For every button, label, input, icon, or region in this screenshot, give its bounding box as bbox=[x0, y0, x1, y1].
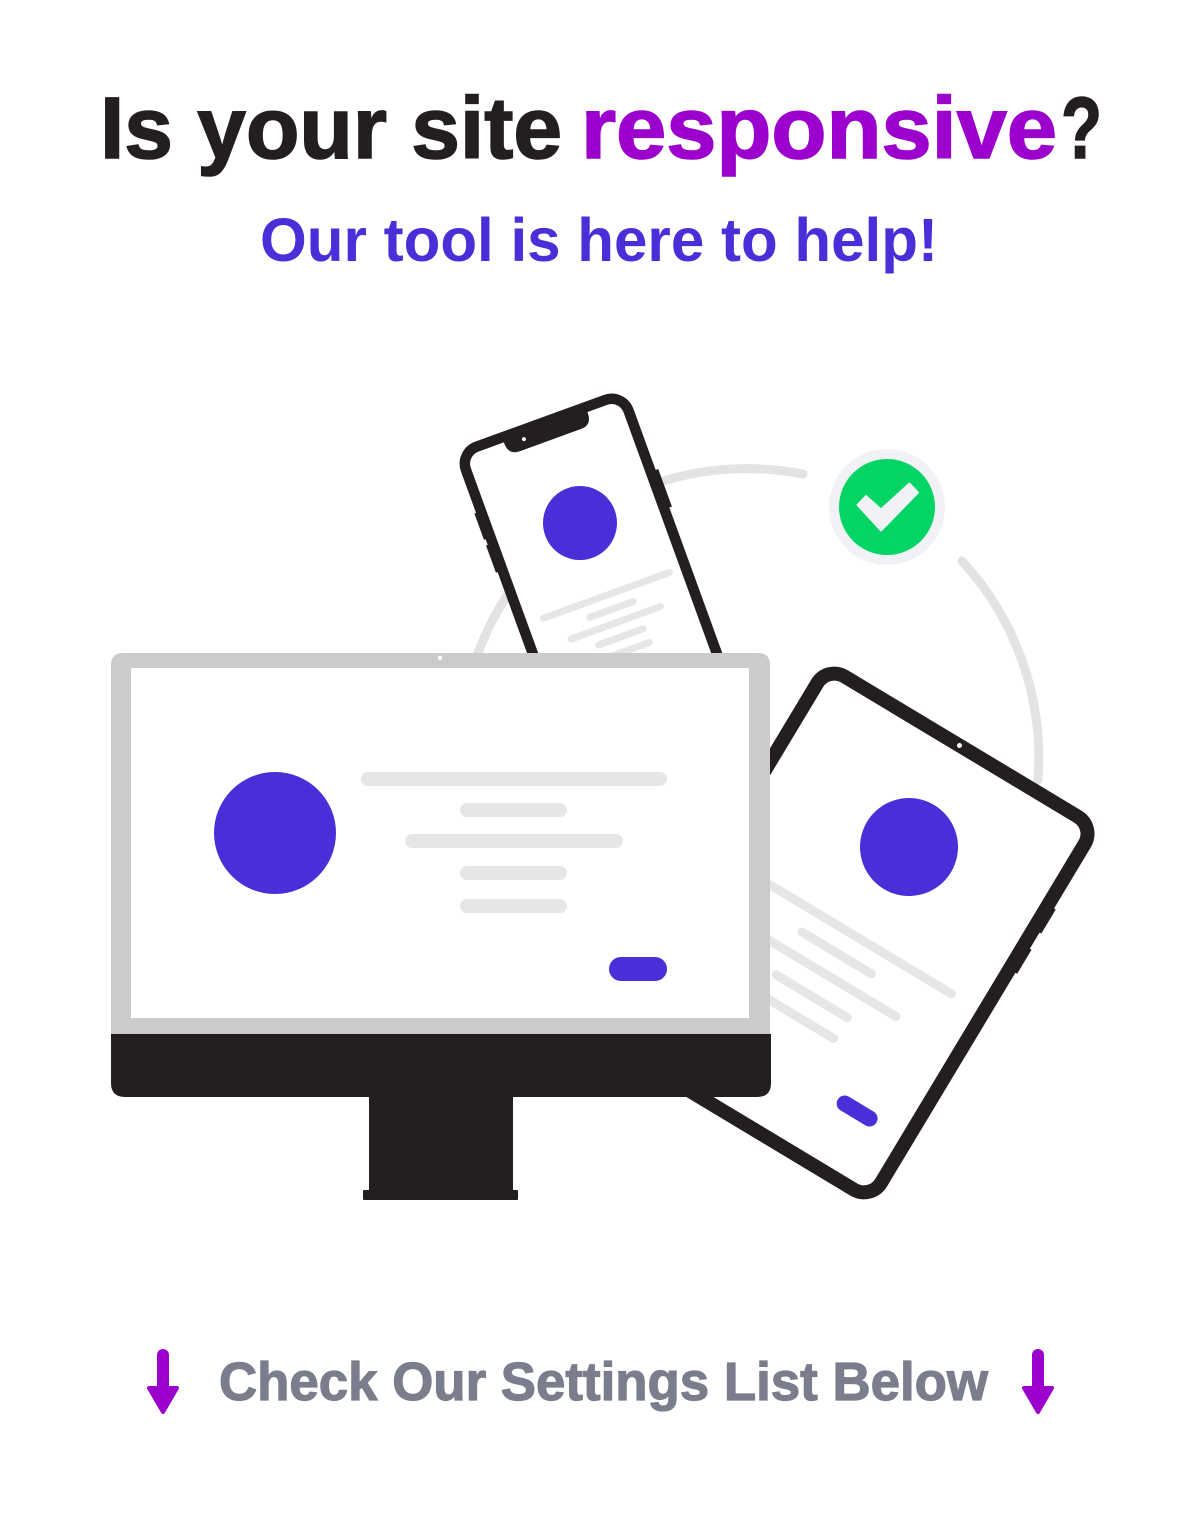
title: ? bbox=[1061, 80, 1102, 177]
title: Is your site bbox=[100, 80, 562, 177]
phone bbox=[452, 388, 774, 850]
illustration: responsive devices bbox=[111, 388, 1104, 1204]
icon: right down arrow bbox=[1024, 1349, 1052, 1412]
monitor bbox=[111, 653, 771, 1200]
monitor text lines bbox=[361, 772, 667, 913]
subtitle: Our tool is here to help! bbox=[260, 206, 938, 274]
title bbox=[100, 80, 1102, 177]
dashed orbit arc bbox=[478, 469, 1039, 780]
call to action text: Check Our Settings List Below bbox=[219, 1352, 989, 1412]
monitor button bbox=[609, 957, 667, 981]
icon: left down arrow bbox=[149, 1349, 177, 1412]
icon: green check badge bbox=[829, 449, 945, 565]
tablet bbox=[603, 664, 1104, 1204]
title: responsive bbox=[581, 80, 1057, 177]
monitor avatar circle bbox=[214, 772, 336, 894]
